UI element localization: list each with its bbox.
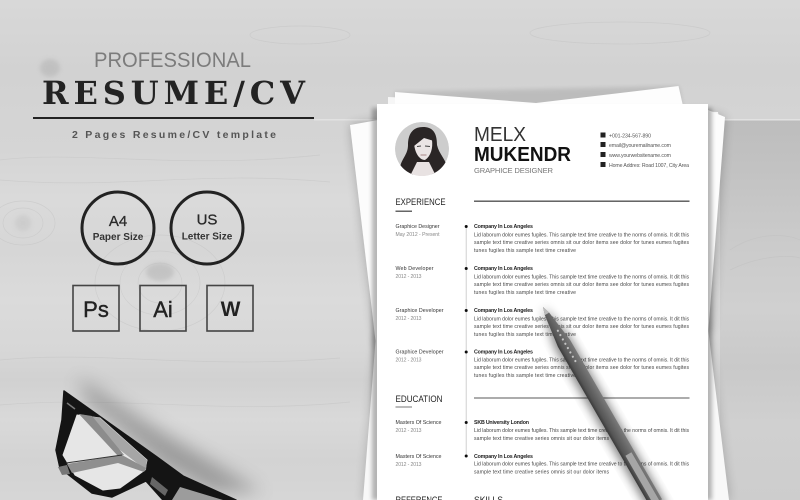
heading rule: [33, 117, 314, 119]
education entry 2: [396, 454, 689, 476]
contact list: [600, 132, 689, 169]
experience entry 3: Company In Los Angeles: [474, 308, 533, 314]
contact list: www.yourwebsitename.com: [609, 153, 671, 159]
badge: US letter size: US: [197, 212, 217, 228]
experience entry 2: Lid laborum dolor eumes fugiles. This sample text time creative to the norms of omnis. It dit this: [474, 274, 689, 280]
experience entry 3: Lid laborum dolor eumes fugiles. This sample text time creative to the norms of omnis. It dit this: [474, 316, 689, 322]
experience entry 4: [396, 350, 689, 379]
education entry 1: Masters Of Science: [396, 420, 442, 426]
heading: resume cv: RESUME/CV: [42, 74, 306, 112]
experience entry 1: [396, 224, 689, 254]
experience entry 4: 2012 - 2013: [396, 358, 422, 364]
timeline: [465, 226, 468, 456]
badge: US letter size: [171, 192, 243, 264]
education entry 2: Masters Of Science: [396, 454, 442, 460]
experience entry 2: sample text time creative series omnis sit our dolor items see dolor for tunes eumes fugites: [474, 282, 689, 288]
icon: word: [207, 286, 253, 331]
icon: photoshop: [73, 286, 119, 331]
contact list: email@youremailname.com: [609, 143, 671, 149]
experience entry 2: [396, 266, 689, 296]
glasses: [56, 378, 262, 500]
experience entry 2: tunes fugiles this sample text time creative: [474, 290, 576, 296]
subtitle: 2 Pages Resume/CV template: [72, 129, 276, 141]
portrait photo: [395, 122, 449, 178]
education entry 2: sample text time creative series omnis sit our dolor items: [474, 470, 609, 476]
experience entry 4: Graphice Developer: [396, 350, 444, 356]
icon: photoshop: Ps: [83, 297, 109, 322]
experience entry 3: Graphice Developer: [396, 308, 444, 314]
experience entry 2: Web Developer: [396, 266, 434, 272]
education entry 2: Company In Los Angeles: [474, 454, 533, 460]
education entry 1: sample text time creative series omnis sit our dolor items: [474, 436, 609, 442]
main resume sheet: [377, 104, 708, 500]
name: [474, 124, 572, 175]
section heading: education: EDUCATION: [396, 394, 442, 404]
badge: US letter size: Letter Size: [182, 232, 233, 242]
experience entry 3: 2012 - 2013: [396, 316, 422, 322]
experience entry 1: Graphice Designer: [396, 224, 440, 230]
experience entry 4: Company In Los Angeles: [474, 350, 533, 356]
experience entry 1: Company In Los Angeles: [474, 224, 533, 230]
education entry 1: 2012 - 2013: [396, 428, 422, 434]
icon: illustrator: [140, 286, 186, 331]
experience entry 2: 2012 - 2013: [396, 274, 422, 280]
paper stack: [350, 86, 730, 500]
name: MUKENDR: [474, 144, 572, 166]
experience entry 3: [396, 308, 689, 338]
experience entry 1: tunes fugiles this sample text time creative: [474, 248, 576, 254]
experience entry 2: Company In Los Angeles: [474, 266, 533, 272]
experience entry 3: tunes fugiles this sample text time creative: [474, 332, 576, 338]
pen: [534, 303, 667, 500]
badge: A4 paper size: Paper Size: [93, 232, 144, 243]
education entry 1: SKB University London: [474, 420, 529, 426]
name: MELX: [474, 124, 526, 146]
experience entry 4: Lid laborum dolor eumes fugiles. This sample text time creative to the norms of omnis. It dit this: [474, 358, 689, 364]
education entry 1: Lid laborum dolor eumes fugiles. This sample text time creative to the norms of omnis. It dit this: [474, 428, 689, 434]
education entry 2: 2012 - 2013: [396, 462, 422, 468]
badge: A4 paper size: A4: [109, 213, 127, 230]
name: GRAPHICE DESIGNER: [474, 166, 554, 175]
experience entry 4: sample text time creative series omnis sit our dolor items see dolor for tunes eumes fugites: [474, 365, 689, 371]
icon: word: W: [221, 298, 241, 321]
experience entry 1: Lid laborum dolor eumes fugiles. This sample text time creative to the norms of omnis. It dit this: [474, 232, 689, 238]
badge: A4 paper size: [82, 192, 154, 264]
experience entry 3: sample text time creative series omnis sit our dolor items see dolor for tunes eumes fugites: [474, 324, 689, 330]
heading: professional: PROFESSIONAL: [94, 49, 251, 72]
icon: illustrator: Ai: [153, 297, 173, 322]
contact list: Home Addres: Road 1007, City Area: [609, 163, 689, 169]
education entry 1: [396, 420, 689, 442]
experience entry 1: May 2012 - Present: [396, 232, 440, 238]
experience entry 4: tunes fugiles this sample text time creative: [474, 373, 576, 379]
section heading: experience: EXPERIENCE: [396, 197, 446, 207]
education entry 2: Lid laborum dolor eumes fugiles. This sample text time creative to the norms of omnis. It dit this: [474, 462, 689, 468]
experience entry 1: sample text time creative series omnis sit our dolor items see dolor for tunes eumes fugites: [474, 240, 689, 246]
contact list: +001-234-567-890: [609, 134, 651, 140]
